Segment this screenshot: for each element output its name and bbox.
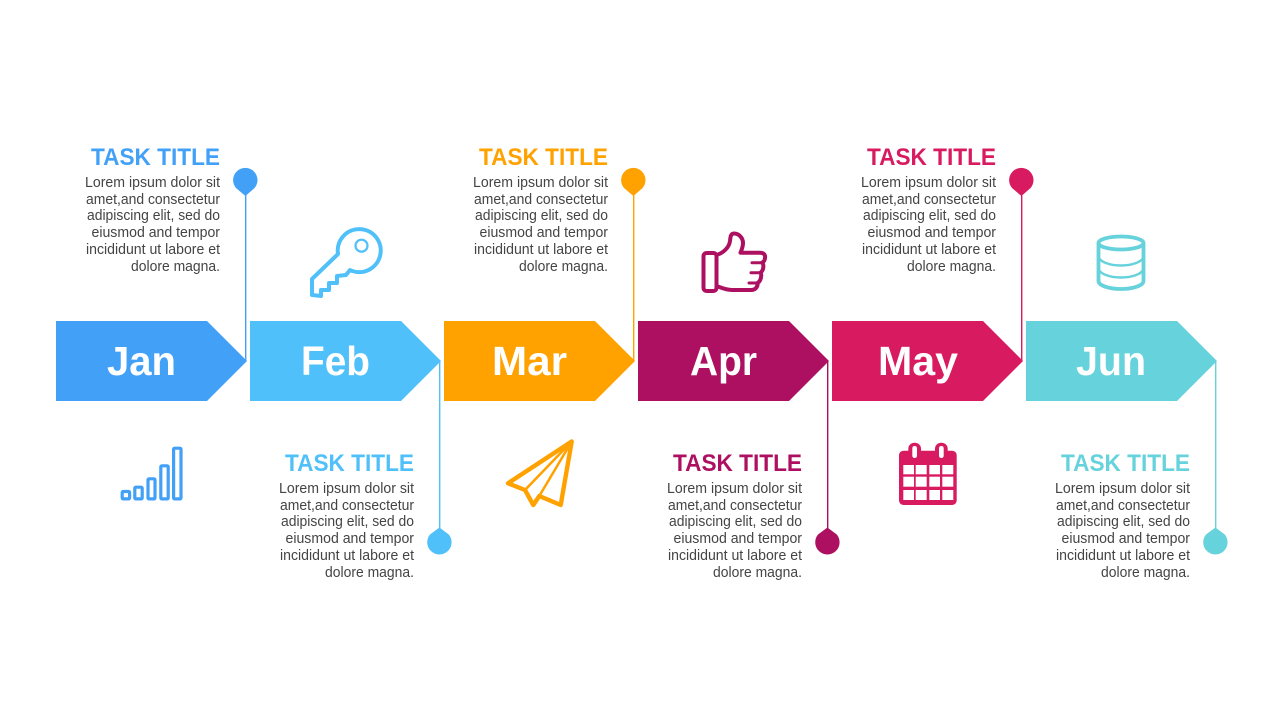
- step: Apr: [638, 234, 840, 581]
- icon: thumbs up: [704, 234, 765, 291]
- task text: Apr: incididunt ut labore et: [668, 548, 802, 564]
- icon: paper plane: [508, 442, 572, 505]
- task text: Jun: eiusmod and tempor: [1062, 531, 1190, 547]
- label: Mar: Mar: [492, 338, 567, 384]
- task text: Apr: Lorem ipsum dolor sit: [667, 481, 802, 497]
- task text: Jan: adipiscing elit, sed do: [87, 208, 220, 224]
- task text: Jan: incididunt ut labore et: [86, 242, 220, 258]
- task text: Mar: [473, 144, 608, 275]
- task text: Feb: eiusmod and tempor: [286, 531, 414, 547]
- task text: Jun: amet,and consectetur: [1056, 498, 1190, 514]
- task text: Mar: eiusmod and tempor: [480, 225, 608, 241]
- task text: Feb: Lorem ipsum dolor sit: [279, 481, 414, 497]
- arrow: Jun: [1026, 321, 1217, 401]
- pin: May: [1009, 168, 1034, 361]
- icon: calendar: [899, 443, 957, 505]
- task text: Jan: TASK TITLE: [91, 144, 220, 171]
- task text: Mar: incididunt ut labore et: [474, 242, 608, 258]
- task text: Mar: dolore magna.: [519, 259, 608, 275]
- task text: May: Lorem ipsum dolor sit: [861, 175, 996, 191]
- task text: Apr: [667, 450, 802, 581]
- arrow: Jan: [56, 321, 247, 401]
- label: Apr: Apr: [690, 338, 757, 384]
- pin: Mar: [621, 168, 646, 361]
- task text: May: amet,and consectetur: [862, 192, 996, 208]
- label: Feb: Feb: [301, 338, 370, 384]
- step: Jun: [1026, 236, 1228, 581]
- task text: Apr: amet,and consectetur: [668, 498, 802, 514]
- task text: Feb: amet,and consectetur: [280, 498, 414, 514]
- task text: Apr: TASK TITLE: [673, 450, 802, 477]
- step: May: [832, 144, 1034, 505]
- task text: Feb: TASK TITLE: [285, 450, 414, 477]
- arrow: Feb: [250, 321, 441, 401]
- task text: Jan: eiusmod and tempor: [92, 225, 220, 241]
- task text: Jun: [1055, 450, 1190, 581]
- arrow: Mar: [444, 321, 635, 401]
- label: May: May: [878, 338, 958, 384]
- task text: Jan: [85, 144, 220, 275]
- task text: May: dolore magna.: [907, 259, 996, 275]
- task text: Jan: dolore magna.: [131, 259, 220, 275]
- arrow: Apr: [638, 321, 829, 401]
- task text: Mar: adipiscing elit, sed do: [475, 208, 608, 224]
- task text: Feb: [279, 450, 414, 581]
- step: Mar: [444, 144, 646, 505]
- pin: Jan: [233, 168, 258, 361]
- step: Jan: [56, 144, 258, 499]
- task text: May: incididunt ut labore et: [862, 242, 996, 258]
- task text: Apr: eiusmod and tempor: [674, 531, 802, 547]
- task text: Feb: incididunt ut labore et: [280, 548, 414, 564]
- arrow: May: [832, 321, 1023, 401]
- task text: Mar: TASK TITLE: [479, 144, 608, 171]
- task text: Mar: amet,and consectetur: [474, 192, 608, 208]
- task text: Jun: Lorem ipsum dolor sit: [1055, 481, 1190, 497]
- task text: Apr: adipiscing elit, sed do: [669, 514, 802, 530]
- pin: Apr: [815, 361, 840, 554]
- task text: Jun: adipiscing elit, sed do: [1057, 514, 1190, 530]
- task text: Feb: dolore magna.: [325, 565, 414, 581]
- icon: signal bars: [122, 448, 181, 499]
- pin: Jun: [1203, 361, 1228, 554]
- icon: key: [312, 229, 381, 296]
- task text: Mar: Lorem ipsum dolor sit: [473, 175, 608, 191]
- task text: Jan: amet,and consectetur: [86, 192, 220, 208]
- task text: Feb: adipiscing elit, sed do: [281, 514, 414, 530]
- pin: Feb: [427, 361, 452, 554]
- task text: Apr: dolore magna.: [713, 565, 802, 581]
- task text: May: eiusmod and tempor: [868, 225, 996, 241]
- label: Jun: Jun: [1076, 338, 1146, 384]
- icon: database: [1098, 236, 1144, 289]
- task text: Jun: TASK TITLE: [1061, 450, 1190, 477]
- task text: Jun: incididunt ut labore et: [1056, 548, 1190, 564]
- task text: May: TASK TITLE: [867, 144, 996, 171]
- step: Feb: [250, 229, 452, 581]
- label: Jan: Jan: [107, 338, 176, 384]
- task text: May: adipiscing elit, sed do: [863, 208, 996, 224]
- task text: Jan: Lorem ipsum dolor sit: [85, 175, 220, 191]
- task text: May: [861, 144, 996, 275]
- task text: Jun: dolore magna.: [1101, 565, 1190, 581]
